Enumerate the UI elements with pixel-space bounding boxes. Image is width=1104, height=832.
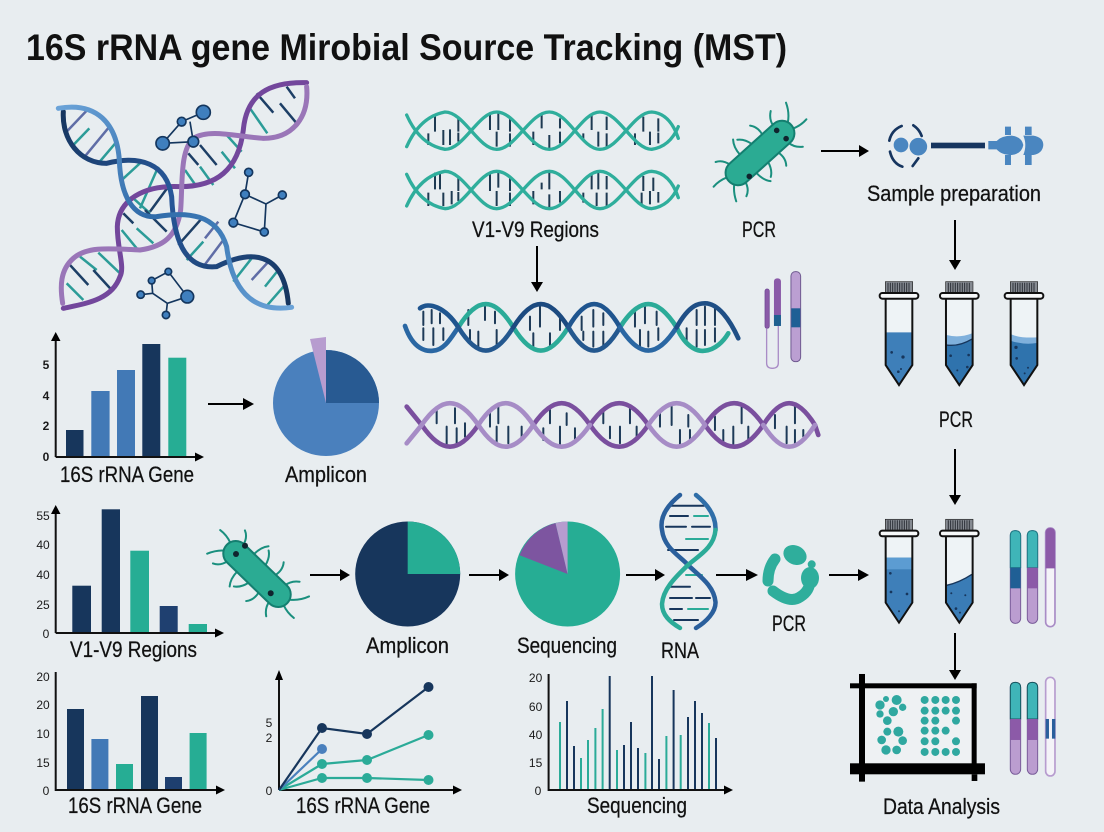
pie chart: Amplicon navy: Amplicon	[366, 633, 449, 658]
arrow: tubes to data analysis	[949, 633, 961, 680]
pie chart: Sequencing: Sequencing	[517, 633, 617, 658]
icon: bacterium (PCR)	[699, 94, 821, 212]
bar chart: V1-V9 Regions: 55	[36, 509, 50, 523]
molecule 3	[137, 268, 194, 319]
bar chart: 16S rRNA Gene bottom: 20	[36, 670, 50, 684]
bar chart: 16S rRNA Gene top	[43, 332, 204, 487]
line chart: 16S rRNA Gene: 16S rRNA Gene	[296, 793, 430, 818]
bar chart: 16S rRNA Gene bottom: 20	[36, 698, 50, 712]
teal digit dots	[875, 695, 907, 755]
teal dot grid	[921, 696, 960, 756]
bar chart: 16S rRNA Gene bottom: 10	[36, 727, 50, 741]
arrow: sequencing to RNA	[626, 569, 665, 581]
bar chart: 16S rRNA Gene top: 4	[43, 389, 50, 403]
pie chart: Sequencing	[515, 522, 620, 658]
spike chart: Sequencing: 20	[529, 671, 543, 685]
line chart: 16S rRNA Gene: 0	[266, 784, 273, 798]
label: V1-V9 Regions: V1-V9 Regions	[472, 217, 599, 242]
title: 16S rRNA gene Mirobial Source Tracking (MST)	[26, 27, 787, 68]
arrow: amplicon to sequencing	[469, 569, 509, 581]
label: RNA: RNA	[661, 638, 699, 663]
bar chart: 16S rRNA Gene bottom: 0	[43, 784, 50, 798]
arrow: regions down	[531, 246, 543, 292]
spike chart: Sequencing: Sequencing	[587, 793, 687, 818]
molecule 2	[229, 168, 286, 236]
tube 4	[880, 519, 918, 623]
teal helix 1	[407, 112, 678, 149]
chart frame: data analysis	[850, 674, 985, 782]
arrow: sample preparation to tubes	[949, 220, 961, 270]
arrow: chart to pie	[208, 398, 254, 410]
tube 2	[940, 282, 979, 385]
strips upper	[1010, 528, 1055, 627]
DNA base-pair rungs	[67, 87, 297, 307]
arrow: PCR to lower tubes	[949, 449, 961, 505]
panel: strips and data analysis	[850, 528, 1055, 782]
spike chart: Sequencing	[529, 671, 733, 818]
label: PCR right: PCR	[939, 407, 973, 432]
tube 3	[1005, 282, 1043, 385]
bar chart: V1-V9 Regions: 40	[36, 568, 50, 582]
teal helix 2	[407, 171, 678, 209]
bar chart: 16S rRNA Gene bottom	[36, 670, 225, 818]
blue helix strands	[58, 107, 292, 308]
bar chart: 16S rRNA Gene top: 0	[43, 450, 50, 464]
arrow: bacterium to amplicon	[310, 569, 350, 581]
bar chart: 16S rRNA Gene bottom: 15	[36, 756, 50, 770]
label: PCR: PCR	[742, 217, 776, 242]
icon: RNA helix	[662, 495, 716, 628]
tube row: lower	[880, 519, 979, 623]
icon: PCR ring	[768, 541, 819, 599]
blue and teal helix	[405, 303, 738, 351]
DNA helices: upper middle	[405, 112, 818, 447]
bar chart: V1-V9 Regions: V1-V9 Regions	[70, 637, 197, 662]
spike chart: Sequencing: 0	[535, 784, 542, 798]
label: Data Analysis: Data Analysis	[883, 794, 1000, 819]
molecule 1	[156, 105, 210, 150]
line chart: 16S rRNA Gene: 5	[266, 716, 273, 730]
bar chart: 16S rRNA Gene top: 5	[43, 358, 50, 372]
arrow: RNA to PCR	[716, 569, 758, 581]
label: Sample preparation: Sample preparation	[867, 181, 1041, 206]
line chart: 16S rRNA Gene: 2	[266, 731, 273, 745]
spike chart: Sequencing: 60	[529, 700, 543, 714]
spike chart: Sequencing: 15	[529, 756, 543, 770]
arrow: PCR to tubes	[829, 569, 869, 581]
chromosome strips	[765, 272, 801, 368]
arrow: to sample preparation	[821, 145, 869, 157]
pie chart: Amplicon blue	[273, 337, 379, 487]
line chart: 16S rRNA Gene	[266, 670, 462, 818]
bar chart: V1-V9 Regions: 0	[43, 627, 50, 641]
bar chart: 16S rRNA Gene bottom: 16S rRNA Gene	[68, 793, 202, 818]
purple helix	[407, 403, 818, 447]
icon: bacterium lower	[197, 514, 317, 634]
bar chart: 16S rRNA Gene top: 2	[43, 419, 50, 433]
icon: sample preparation apparatus	[889, 125, 1043, 167]
tube 5	[940, 519, 979, 623]
bar chart: 16S rRNA Gene top: 16S rRNA Gene	[60, 462, 194, 487]
label: PCR ring: PCR	[772, 611, 806, 636]
pie chart: Amplicon navy	[355, 522, 460, 658]
tube 1	[880, 282, 918, 385]
illustration: intertwined DNA helices and molecules	[58, 83, 307, 319]
spike chart: Sequencing: 40	[529, 728, 543, 742]
bar chart: V1-V9 Regions	[36, 505, 224, 662]
tube row: PCR	[880, 282, 1043, 385]
bar chart: V1-V9 Regions: 25	[36, 598, 50, 612]
bar chart: V1-V9 Regions: 40	[36, 538, 50, 552]
pie chart: Amplicon blue: Amplicon	[285, 462, 367, 487]
strips lower	[1010, 677, 1055, 776]
purple helix strands	[61, 83, 307, 308]
